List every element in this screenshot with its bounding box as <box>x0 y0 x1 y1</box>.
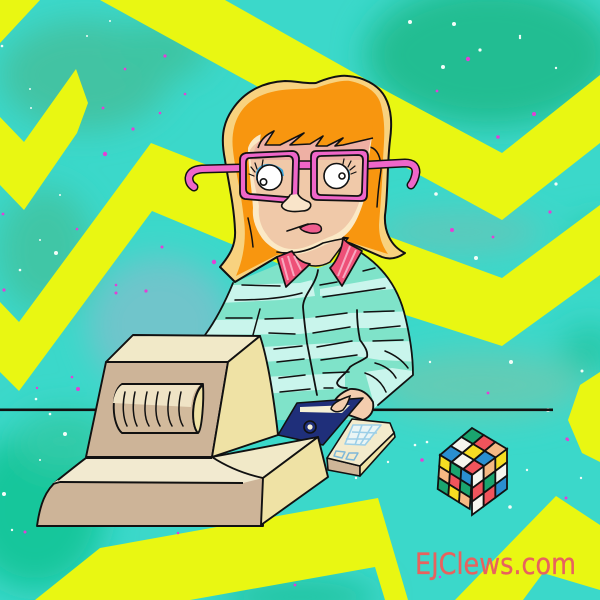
hair <box>220 76 405 282</box>
eyes <box>249 159 356 190</box>
neck <box>284 232 348 266</box>
keypad <box>327 419 395 476</box>
glasses <box>189 150 416 203</box>
terminal screen face <box>86 362 228 457</box>
rubik's cube <box>438 428 507 515</box>
terminal upper top face <box>106 335 260 362</box>
fringe <box>250 125 373 160</box>
nose <box>282 194 311 212</box>
mouth <box>287 224 321 233</box>
floppy disk <box>278 396 363 445</box>
counter line <box>0 408 553 411</box>
printer roller <box>113 384 203 433</box>
terminal side <box>212 336 278 457</box>
signature: EJClews.com <box>415 547 576 581</box>
sweater outline and seams <box>205 252 413 405</box>
terminal base <box>37 437 328 526</box>
collar <box>277 238 362 287</box>
face <box>248 129 372 254</box>
hand <box>332 389 373 420</box>
computer terminal <box>37 335 328 526</box>
sweater <box>200 252 420 420</box>
